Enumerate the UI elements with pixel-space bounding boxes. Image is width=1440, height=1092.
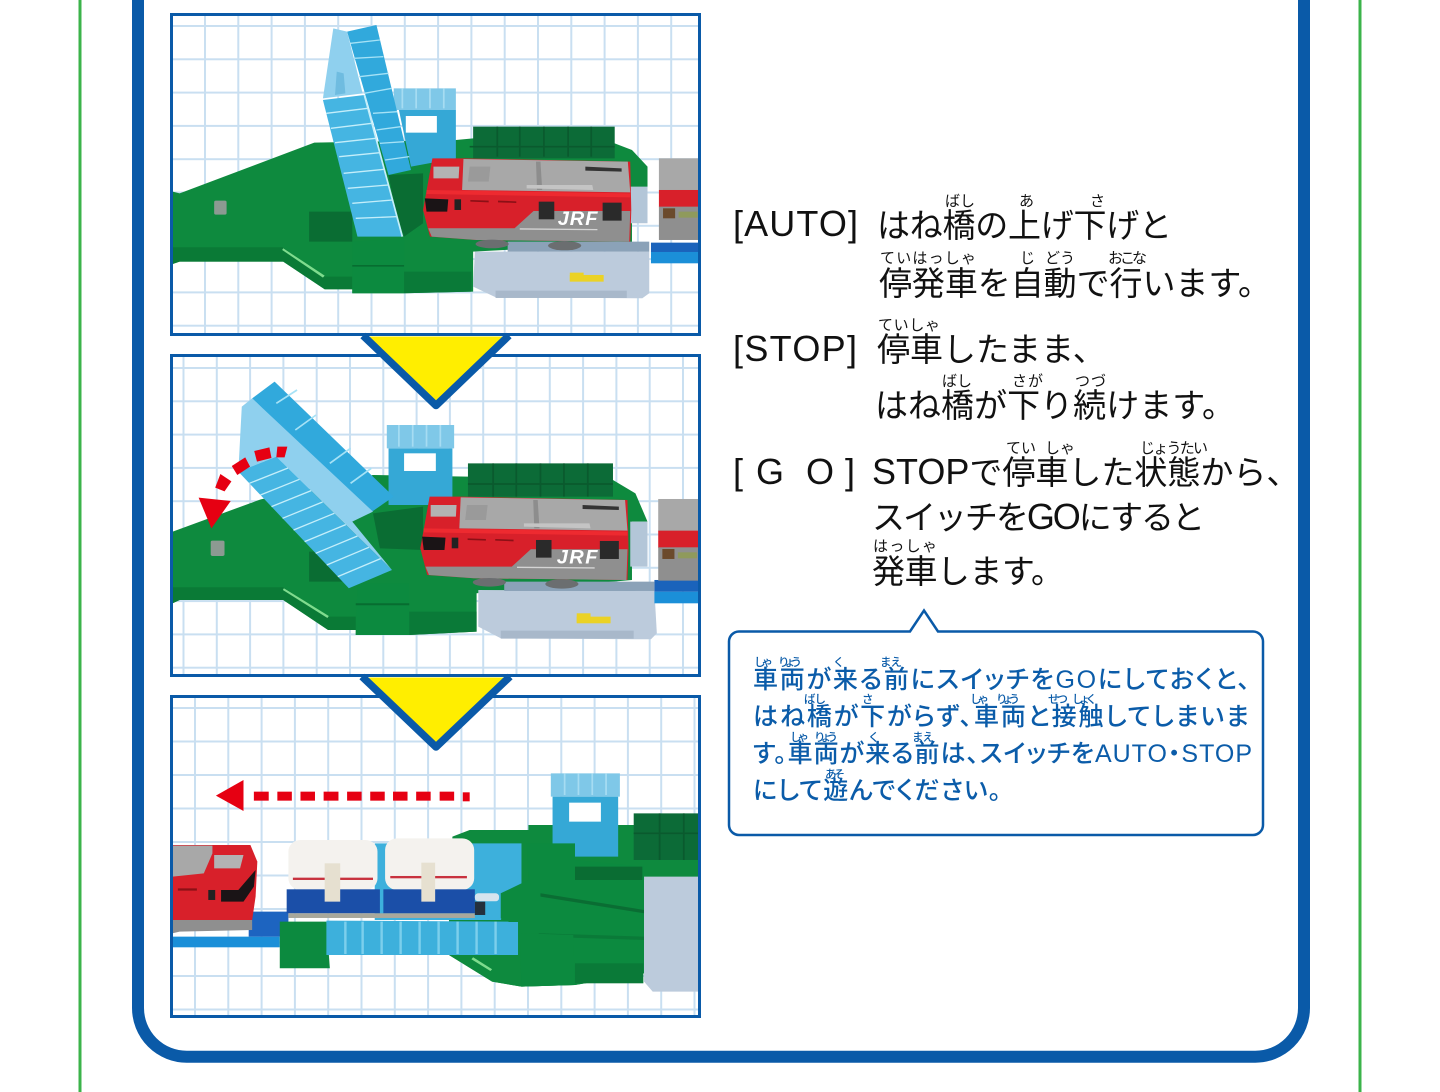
text block: AUTO: さ	[1090, 193, 1105, 210]
panel: AUTO photo	[172, 14, 701, 334]
text block: GO: はっしゃ	[873, 538, 937, 555]
toy: locomotive	[423, 158, 631, 250]
text block: GO	[733, 440, 1299, 590]
toy: shed	[394, 88, 456, 167]
text block: AUTO: どう	[1045, 250, 1075, 267]
toy: green base	[173, 127, 648, 293]
text block: GO: しゃ	[1045, 440, 1075, 457]
blue rounded frame	[138, 0, 1304, 1057]
text block: AUTO: はね橋の上げ下げと	[877, 207, 1172, 244]
toy: blue track	[508, 187, 701, 263]
text block: GO: じょうたい	[1140, 440, 1208, 457]
text block: GO: スイッチをGOにすると	[872, 496, 1205, 537]
text block: STOP: ていしゃ	[878, 317, 940, 334]
callout	[729, 610, 1263, 835]
panel: STOP photo	[172, 356, 701, 676]
text block: AUTO: [AUTO]	[733, 203, 858, 244]
arrow outline: triangle 2	[362, 676, 510, 747]
toy: tank wagons	[287, 838, 499, 918]
callout text: しゃ	[970, 693, 989, 706]
text block: GO: [	[733, 451, 743, 492]
toy: green base	[173, 463, 648, 635]
text block: GO: O	[806, 451, 834, 492]
toy: JRF logo: JRF	[557, 547, 598, 568]
callout text: りょう	[814, 731, 838, 744]
text block: STOP: つづ	[1075, 373, 1106, 390]
toy: locomotive	[420, 497, 629, 589]
callout text: す。車両が来る前は、スイッチをAUTO・STOP	[753, 740, 1252, 768]
callout text: まえ	[912, 731, 934, 744]
arrow: yellow triangle 2	[362, 678, 510, 748]
toy: grey platform	[478, 590, 657, 639]
toy: lowered bridge	[238, 382, 394, 588]
toy: shed	[551, 773, 620, 857]
callout text: はね橋が下がらず、車両と接触してしまいま	[753, 703, 1249, 731]
text block: AUTO: ていはっしゃ	[880, 250, 976, 267]
arrow: yellow triangle 1	[363, 336, 509, 406]
toy: grey platform	[644, 877, 701, 992]
toy: light blue deck	[375, 843, 521, 920]
panel: GO photo	[172, 696, 701, 1016]
arrow: curved bridge-lowering arrow	[199, 447, 287, 528]
text block: STOP: さが	[1012, 373, 1043, 390]
text block: AUTO: 停発車を自動で行います。	[879, 265, 1271, 302]
callout text: せつ	[1048, 693, 1068, 706]
toy: locomotive departing	[173, 845, 257, 933]
callout text: さ	[862, 693, 874, 706]
callout text: く	[868, 731, 880, 744]
callout text: にして遊んでください。	[753, 777, 1001, 805]
text block: STOP: ばし	[942, 373, 972, 390]
toy: raised bridge	[323, 25, 411, 237]
toy: shed	[387, 425, 454, 505]
text block: AUTO: じ	[1020, 250, 1035, 267]
text block: STOP: 停車したまま、	[877, 331, 1106, 368]
callout text	[753, 656, 1252, 805]
callout text: あそ	[825, 768, 845, 781]
text block: AUTO	[733, 193, 1271, 302]
callout text: く	[833, 656, 844, 669]
toy: grey platform	[473, 252, 649, 298]
toy: next car	[659, 158, 700, 240]
text block: GO: STOPで停車した状態から、	[872, 451, 1299, 492]
callout text: 車両が来る前にスイッチをGOにしておくと、	[753, 666, 1250, 694]
toy: blue track	[504, 522, 701, 603]
callout text: まえ	[880, 656, 902, 669]
toy: JRF logo: JRF	[558, 208, 598, 230]
text block: GO: ]	[845, 451, 855, 492]
arrow outline: triangle 1	[363, 336, 509, 406]
callout text: ばし	[804, 693, 826, 706]
text block: STOP	[733, 317, 1235, 424]
callout text: りょう	[996, 693, 1020, 706]
arrow: dashed departure arrow	[216, 780, 470, 811]
callout text: りょう	[778, 656, 802, 669]
text block: AUTO: あ	[1019, 193, 1034, 210]
toy: blue bridge side	[326, 921, 518, 955]
toy: blue track	[173, 912, 288, 947]
callout box with pointer	[729, 610, 1263, 835]
callout text: しょく	[1072, 693, 1097, 706]
text block: AUTO: ばし	[945, 193, 975, 210]
toy: green track section	[449, 843, 644, 987]
text block: GO: G	[756, 451, 784, 492]
text block: STOP: [STOP]	[733, 328, 857, 369]
toy: next car	[658, 499, 700, 581]
toy: green block	[280, 922, 330, 968]
text block: GO: てい	[1006, 440, 1036, 457]
text block: AUTO: おこな	[1108, 250, 1147, 267]
text block: GO: 発車します。	[872, 553, 1064, 590]
callout text: しゃ	[790, 731, 809, 744]
text block: STOP: はね橋が下り続けます。	[875, 387, 1235, 424]
callout text: しゃ	[754, 656, 773, 669]
toy: green base	[449, 813, 701, 987]
